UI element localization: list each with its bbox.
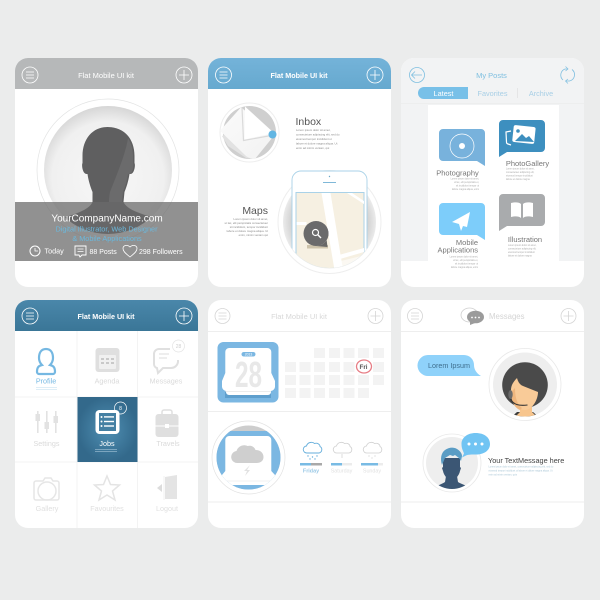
avatar: man with bubble — [423, 433, 490, 493]
post: mobile applications: Lorem ipsum dolor sit amet, — [450, 256, 478, 258]
calendar header — [208, 308, 391, 332]
text message: Your TextMessage here — [488, 456, 564, 465]
menu: logout — [156, 475, 178, 513]
menu: profile — [36, 349, 57, 390]
stat: posts: 88 Posts — [90, 249, 117, 256]
text message: enim ad minim veniam, quis — [488, 474, 518, 476]
stat: followers — [123, 245, 183, 257]
highlighted day — [356, 360, 372, 373]
post: mobile applications — [438, 203, 485, 269]
tabs — [401, 87, 584, 104]
icon: calendar date 28: 2013 — [245, 353, 252, 357]
post: mobile applications: labore magna aliqua, enim — [451, 266, 478, 269]
weather: saturday: Saturday — [331, 468, 353, 474]
calendar day grid — [285, 348, 384, 398]
post: photography: Photography — [436, 168, 479, 178]
menu: settings: Settings — [34, 439, 60, 448]
menu: agenda — [95, 348, 120, 386]
post: photo gallery: labore et dolore magna — [506, 178, 530, 181]
maps text: Lorem ipsum dolor sit amet, — [233, 217, 268, 221]
maps text: sit incididunt, tempor incididunt — [230, 225, 268, 229]
menu: messages — [150, 340, 184, 386]
paper sheet — [428, 105, 559, 275]
inbox text: Inbox — [296, 116, 322, 128]
inbox text: enim ad minim veniam, qui — [296, 146, 330, 150]
post: photo gallery: consectetuer adipiscing elit, — [506, 171, 535, 174]
post: photo gallery: eiusmod tempor incididunt — [506, 174, 533, 178]
maps text: ut lac, elit perspiciatis consectetuer — [225, 221, 268, 225]
menu: jobs (active): 8 — [119, 406, 122, 412]
speech bubble: lorem ipsum — [418, 355, 481, 376]
weather: saturday — [331, 442, 353, 474]
menu: logout: Logout — [156, 504, 178, 513]
panel: inbox and maps — [208, 58, 391, 300]
weather: sunday — [361, 442, 383, 474]
menu: messages: Messages — [150, 376, 183, 386]
highlighted day: Fri — [359, 364, 368, 371]
avatar disc — [37, 99, 179, 247]
inbox header bar — [208, 58, 391, 89]
inbox text: labore et dolore magna aliqua. Ut — [296, 142, 338, 146]
map search pin — [304, 221, 328, 248]
menu: favourites: Favourites — [90, 504, 124, 513]
post: photo gallery: Lorem ipsum dolor sit amet, — [506, 168, 535, 170]
panel: calendar and weather — [208, 300, 391, 528]
text message: Lorem ipsum dolor sit amet, consectetuer adipiscing elit, sed do — [488, 466, 554, 468]
menu header bar — [15, 300, 198, 331]
icon: envelope — [220, 103, 279, 162]
menu: agenda: Agenda — [95, 376, 119, 386]
post: photo gallery: PhotoGallery — [506, 159, 549, 168]
badge — [268, 130, 276, 138]
icon: storm cloud disc — [212, 421, 285, 494]
map illustration — [278, 170, 382, 274]
menu header bar: Flat Mobile UI kit — [77, 312, 135, 321]
messages header — [401, 308, 584, 502]
post: mobile applications: Mobile — [456, 238, 478, 247]
posts header: My Posts — [476, 71, 507, 80]
inbox text: consectetuer adipiscing elit, sed do — [296, 132, 340, 136]
post: illustration: Illustration — [508, 235, 542, 244]
panel: messages — [401, 300, 584, 528]
panel: my posts — [401, 58, 584, 287]
post: photography: Lorem ipsum dolor sit amet, — [451, 178, 479, 180]
maps text: Maps — [242, 205, 268, 217]
post: photography: sit incididunt tempor ut — [456, 184, 479, 188]
avatar: support agent — [489, 348, 561, 426]
post: photography: labore magna aliqua, enim — [452, 188, 479, 191]
text message: eiusmod tempor incididunt ut labore et dolore magna aliqua. Ut — [488, 470, 553, 472]
inbox text: eiusmod tempor incididunt ut — [296, 137, 332, 141]
text message — [488, 456, 564, 476]
post: photography: ut lac, elit perspiciatis et, — [454, 181, 479, 184]
messages header: Messages — [489, 312, 525, 321]
menu: favourites — [90, 476, 124, 513]
post: photo gallery — [499, 120, 549, 181]
icon: calendar date 28 — [218, 342, 278, 402]
stat: today: Today — [44, 246, 64, 256]
maps text: labore et dolore magna aliqua. Ut — [227, 229, 268, 233]
menu: travels — [156, 410, 180, 448]
post: illustration: labore et dolore magna — [508, 254, 532, 258]
calendar header: Flat Mobile UI kit — [271, 312, 328, 321]
post: mobile applications: sit incididunt tempor ut — [455, 262, 478, 266]
weather: sunday: Sunday — [363, 468, 381, 474]
menu: gallery — [34, 478, 59, 513]
info band: Digital Illustrator, Web Designer — [55, 224, 158, 234]
post: illustration: consectetuer adipiscing elit, — [508, 248, 537, 250]
stat: today — [30, 246, 64, 256]
profile header bar — [15, 58, 198, 89]
info band: & Mobile Applications — [72, 234, 142, 243]
tabs: Latest — [434, 89, 453, 98]
weather: friday — [300, 442, 322, 474]
posts header — [410, 66, 575, 84]
menu: jobs (active) — [78, 397, 138, 462]
menu: gallery: Gallery — [36, 504, 59, 513]
info band — [15, 202, 198, 261]
icon: calendar date 28: 28 — [235, 354, 262, 395]
inbox header bar: Flat Mobile UI kit — [270, 71, 328, 80]
profile header bar: Flat Mobile UI kit — [78, 71, 135, 80]
inbox text — [296, 116, 340, 150]
post: illustration: eiusmod tempor incididunt — [508, 251, 535, 254]
post: illustration: Lorem ipsum dolor sit amet, — [508, 244, 537, 247]
post: illustration — [499, 194, 545, 258]
maps text: enim, minim veniam qui — [239, 233, 268, 237]
post: mobile applications: Applications — [438, 246, 478, 254]
menu: travels: Travels — [156, 439, 180, 448]
post: photography — [436, 129, 485, 191]
menu: settings — [34, 411, 60, 448]
menu: messages: 28 — [176, 344, 181, 350]
maps text — [225, 205, 268, 237]
tabs: Favorites — [477, 89, 508, 98]
weather: friday: Friday — [303, 468, 319, 474]
inbox text: Lorem ipsum dolor sit amet, — [296, 128, 331, 132]
menu: profile: Profile — [36, 376, 56, 386]
menu: jobs (active): Jobs — [99, 439, 115, 448]
post: mobile applications: ut lac, elit perspiciatis et, — [453, 259, 478, 262]
panel: profile — [15, 58, 198, 287]
tabs: Archive — [529, 89, 553, 98]
info band: YourCompanyName.com — [51, 214, 163, 224]
bubble with dots — [462, 433, 490, 458]
speech bubble: lorem ipsum: Lorem Ipsum — [428, 361, 470, 370]
panel: menu grid — [15, 300, 198, 528]
stat: followers: 298 Followers — [139, 249, 183, 256]
stat: posts — [75, 246, 117, 257]
